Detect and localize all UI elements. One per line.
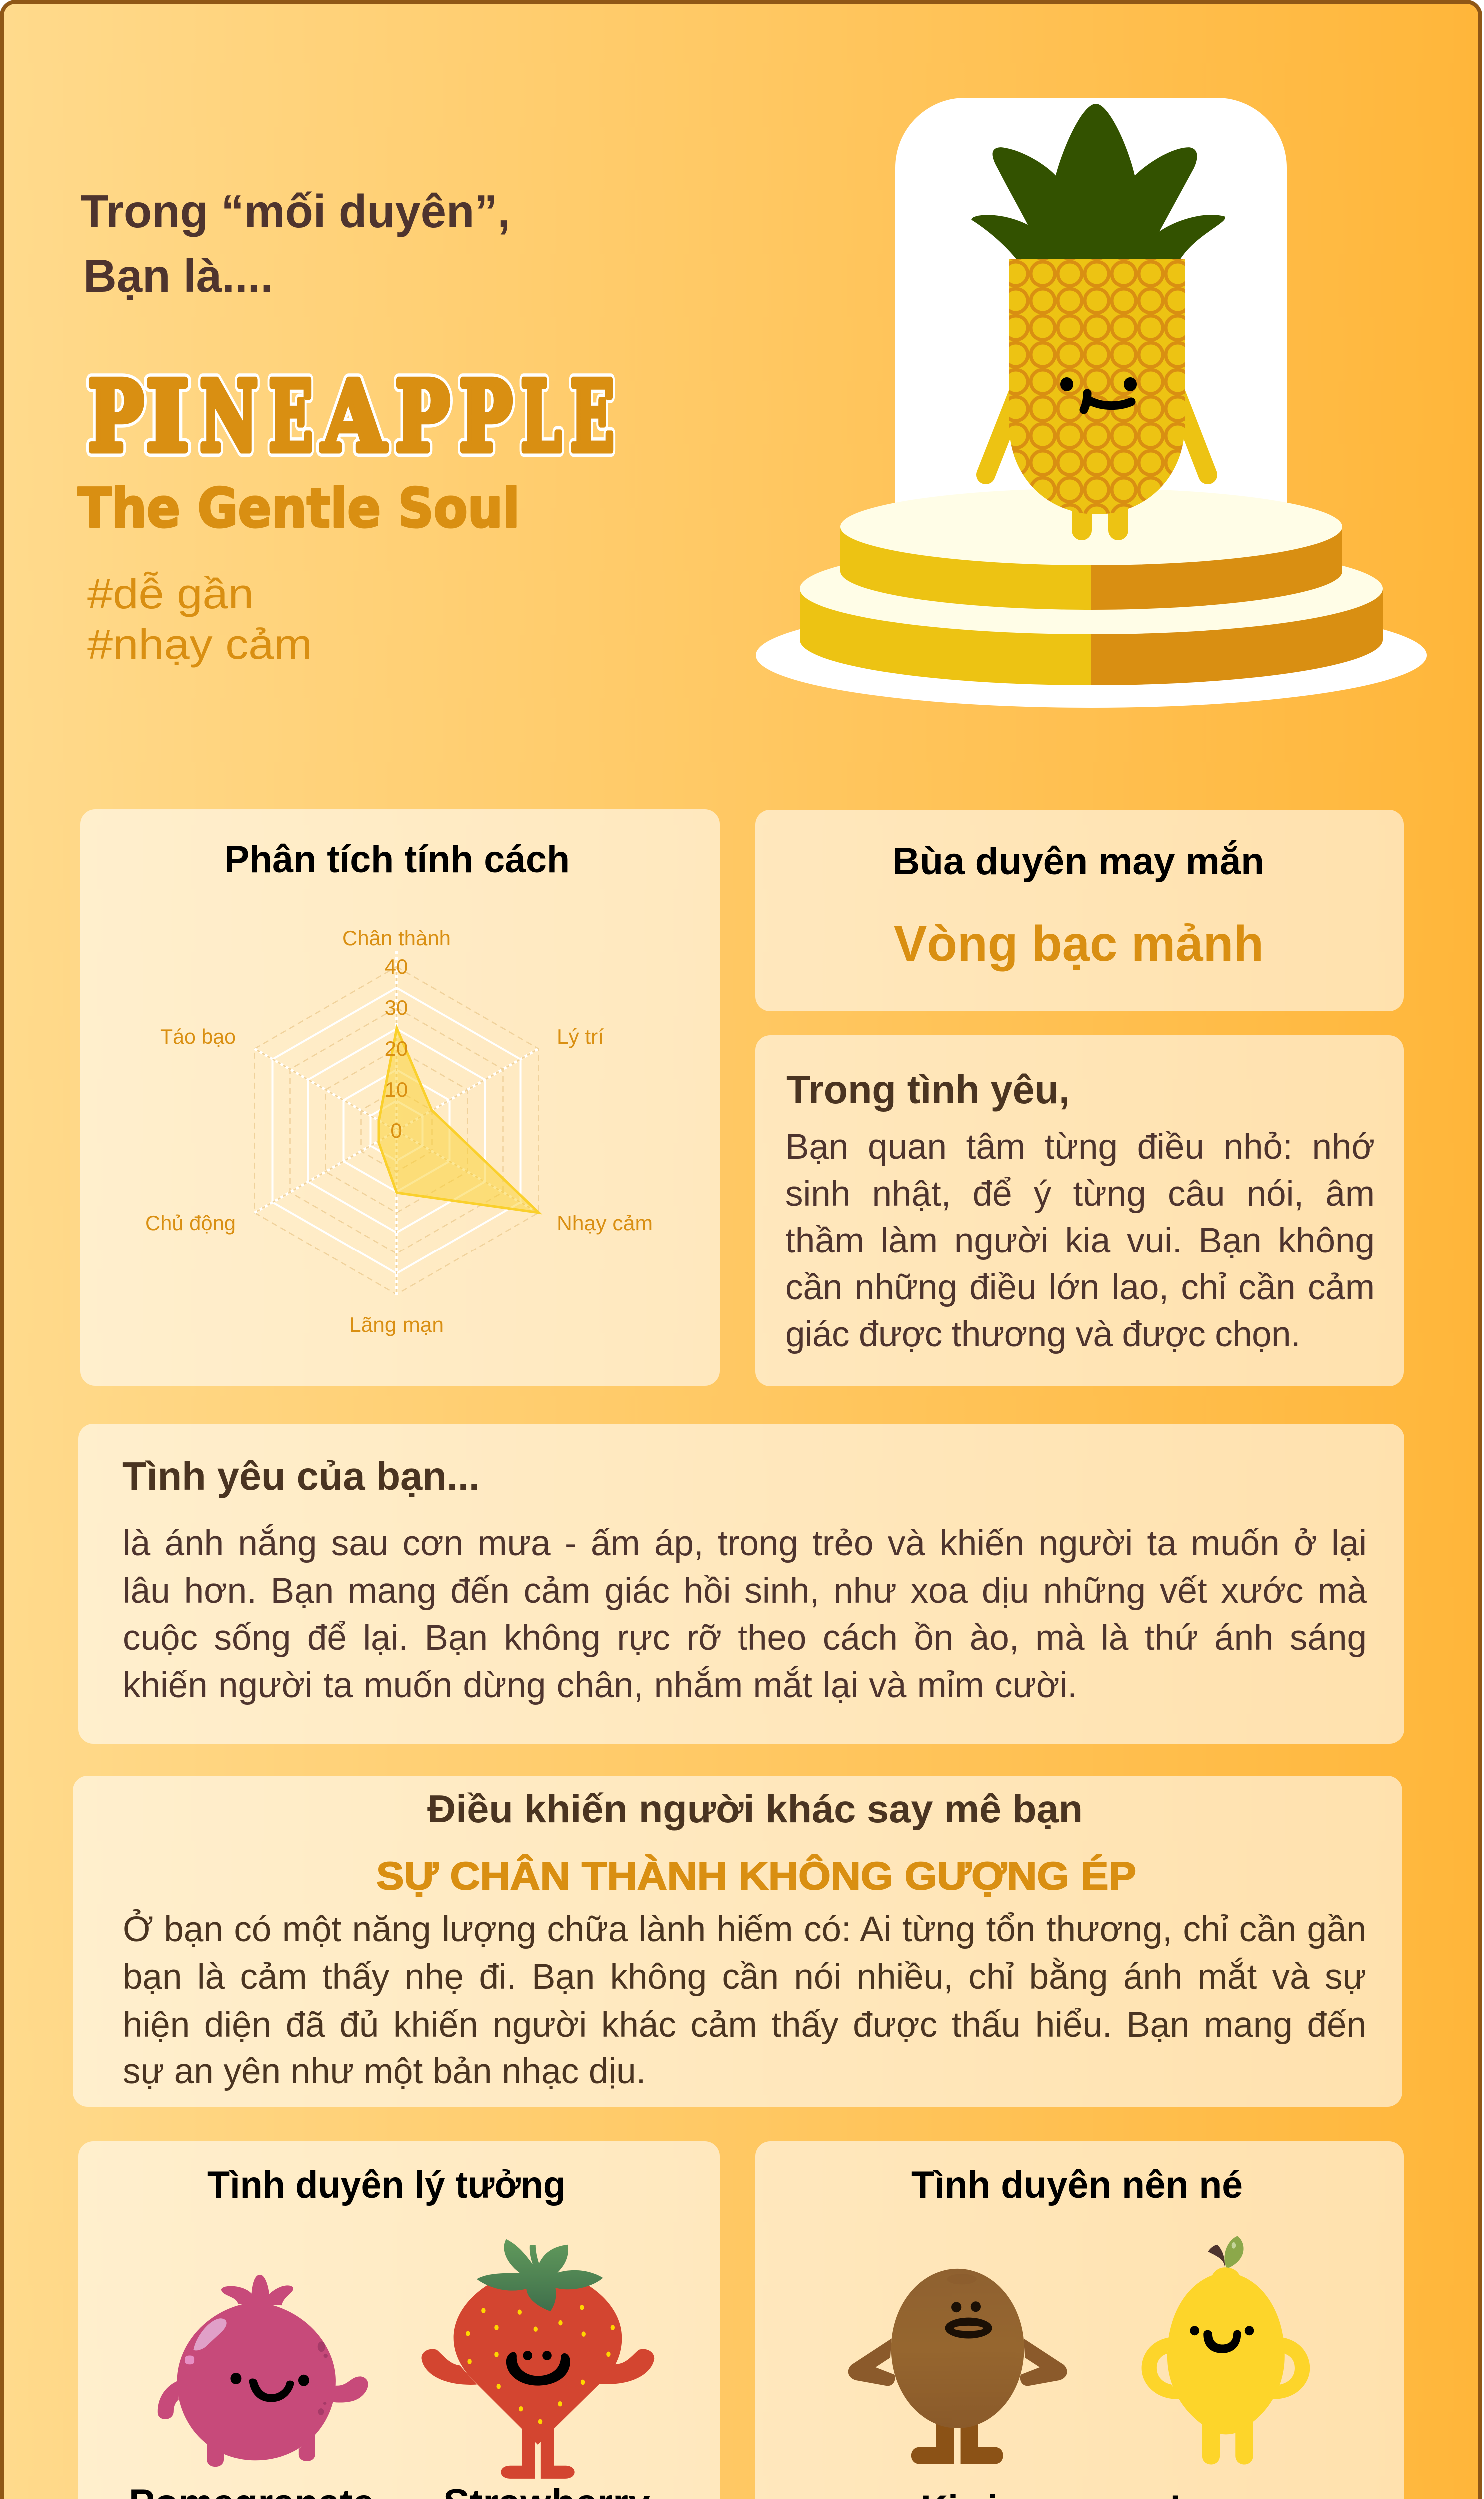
panel: ideal matches (78, 2141, 720, 2499)
title: PINEAPPLE: L (521, 360, 561, 473)
body text (123, 1524, 1367, 1705)
axis values: 10 (385, 1078, 408, 1101)
title: PINEAPPLE: I (146, 359, 189, 473)
axis labels: Lý trí (557, 1025, 604, 1048)
body text: là ánh nắng sau cơn mưa - ấm áp, trong trẻo và khiến người ta muốn ở lại (123, 1524, 1367, 1563)
pineapple character (971, 104, 1225, 530)
title: PINEAPPLE (88, 359, 614, 474)
body text: cuộc sống để lại. Bạn không rực rỡ theo cách ồn ào, mà là thứ ánh sáng (123, 1618, 1367, 1658)
body text: khiến người ta muốn dừng chân, nhắm mắt lại và mỉm cười. (123, 1666, 1077, 1705)
title: PINEAPPLE: P (459, 359, 512, 473)
heading: Trong mối duyên: Bạn là.... (83, 250, 273, 302)
heading: Trong mối duyên (80, 185, 510, 302)
podium (756, 488, 1427, 708)
subtitle: The Gentle Soul: The Gentle Soul (78, 477, 520, 540)
panel: personality radar (80, 809, 720, 1386)
panel title: Bùa duyên may mắn (892, 840, 1264, 883)
hashtags: #dễ gần (87, 570, 254, 617)
title: PINEAPPLE: L (521, 360, 561, 473)
axis labels: Lãng mạn (349, 1313, 444, 1336)
hashtags: #nhạy cảm (87, 621, 312, 668)
title: PINEAPPLE: P (88, 359, 144, 473)
axis labels: Táo bạo (160, 1025, 236, 1048)
heading: Trong mối duyên: Trong “mối duyên”, (80, 185, 510, 237)
panel: matches to avoid (755, 2141, 1404, 2499)
charm name: Vòng bạc mảnh (894, 916, 1264, 972)
body text: lâu hơn. Bạn mang đến cảm giác hồi sinh, như xoa dịu những vết xước mà (123, 1571, 1367, 1611)
character: lemon (1142, 2236, 1310, 2464)
axis labels: Nhạy cảm (557, 1211, 653, 1235)
axis labels: Chủ động (145, 1211, 236, 1235)
body text (123, 1909, 1366, 2091)
body text: sự an yên như một bản nhạc dịu. (123, 2052, 646, 2091)
title: PINEAPPLE: E (269, 360, 313, 473)
title: PINEAPPLE: P (395, 360, 450, 473)
title: PINEAPPLE: N (200, 359, 258, 473)
axis labels: Chân thành (342, 926, 451, 950)
body text: Bạn quan tâm từng điều nhỏ: nhớ (785, 1127, 1375, 1167)
axis values: 40 (385, 955, 408, 978)
panel: lucky charm (755, 810, 1404, 1011)
body text: bạn là cảm thấy nhẹ đi. Bạn không cần nói nhiều, chỉ bằng ánh mắt và sự (123, 1957, 1366, 1997)
highlight phrase: SỰ CHÂN THÀNH KHÔNG GƯỢNG ÉP (376, 1854, 1136, 1898)
title: PINEAPPLE: P (395, 360, 450, 473)
hashtags (87, 570, 312, 668)
axis labels (145, 926, 653, 1336)
panel: what attracts others (73, 1776, 1402, 2107)
panel heading: Điều khiến người khác say mê bạn (427, 1787, 1083, 1831)
title: PINEAPPLE: A (321, 360, 386, 474)
title: PINEAPPLE: E (570, 360, 614, 473)
body text: hiện diện đã đủ khiến người khác cảm thấy được thấu hiểu. Bạn mang đến (123, 2005, 1366, 2045)
title: PINEAPPLE: P (88, 359, 144, 473)
axis values: 20 (385, 1037, 408, 1060)
title: PINEAPPLE: E (570, 360, 614, 473)
panel heading: Tình yêu của bạn... (122, 1454, 480, 1498)
body text: cần những điều lớn lao, chỉ cần cảm (785, 1268, 1375, 1307)
panel: your love (78, 1424, 1404, 1744)
body text: giác được thương và được chọn. (785, 1315, 1300, 1354)
character: kiwi (848, 2269, 1067, 2464)
axis values: 30 (385, 996, 408, 1019)
body text (785, 1127, 1375, 1354)
character: pomegranate (158, 2275, 368, 2467)
axis values: 0 (390, 1119, 402, 1142)
illustration: pineapple on podium (756, 98, 1427, 708)
panel title: Phân tích tính cách (224, 838, 570, 881)
character: strawberry (422, 2239, 654, 2479)
title: PINEAPPLE: I (146, 359, 189, 473)
title: PINEAPPLE: A (321, 360, 386, 474)
panel: in love (755, 1035, 1404, 1386)
header: title and podium illustration (77, 98, 1427, 708)
panel title: Tình duyên nên né (911, 2164, 1243, 2206)
panel heading: Trong tình yêu, (786, 1067, 1070, 1112)
white arch backdrop (895, 98, 1287, 530)
title: PINEAPPLE: N (200, 359, 258, 473)
title: PINEAPPLE: P (459, 359, 512, 473)
body text: thầm làm người kia vui. Bạn không (785, 1221, 1375, 1260)
axis values (385, 955, 408, 1142)
body text: Ở bạn có một năng lượng chữa lành hiếm có: Ai từng tổn thương, chỉ cần gần (123, 1910, 1366, 1949)
title: PINEAPPLE: E (269, 360, 313, 473)
panel title: Tình duyên lý tưởng (207, 2164, 566, 2206)
radar chart (145, 926, 653, 1336)
body text: sinh nhật, để ý từng câu nói, âm (785, 1174, 1375, 1214)
